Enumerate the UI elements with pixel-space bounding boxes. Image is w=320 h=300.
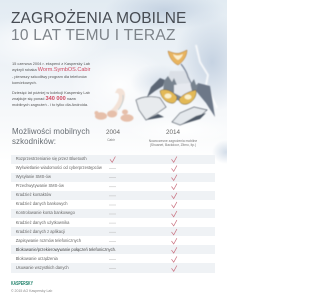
label modern threats: [149, 138, 197, 147]
row 11: Blokowanie/przekierowywanie połączeń telefonicznych: [16, 247, 115, 252]
title: [11, 9, 186, 44]
row 4: Przechwytywanie SMS-ów: [16, 183, 64, 188]
illustration: large scorpion 2014: [135, 49, 216, 126]
row 13: Usuwanie wszystkich danych: [16, 265, 69, 270]
title line 2: 10 LAT TEMU I TERAZ: [11, 27, 176, 44]
row 5: [11, 191, 215, 200]
intro text: wykryli robaka Worm.SymbOS.Cabir: [12, 67, 91, 73]
row 7: Kontrolowanie konta bankowego: [16, 210, 75, 215]
label modern threats: (Shuanet, Backdoor, Zitmo, itp.): [150, 142, 196, 146]
row 5: Kradzież kontaktów: [16, 192, 51, 197]
logo: KASPERSKY: [11, 281, 33, 287]
table heading: [12, 127, 90, 146]
comparison table: [11, 155, 215, 273]
table heading: Możliwości mobilnych: [12, 127, 90, 136]
second text: mobilnych zagrożeń - i to tylko dla Androida.: [12, 102, 88, 107]
row 8: Kradzież danych użytkownika: [16, 220, 69, 225]
row 6: Kradzież danych bankowych: [16, 201, 68, 206]
check marks and dashes: [109, 156, 178, 272]
year 2014: 2014: [166, 129, 180, 136]
row 2: Wyświetlanie wiadomości od cyberprzestępców: [16, 165, 102, 170]
row 9: Kradzież danych z aplikacji: [16, 229, 65, 234]
copyright: © 2015 AO Kaspersky Lab: [11, 289, 52, 293]
row 13: [11, 263, 215, 273]
second text: [12, 90, 90, 107]
row 7: [11, 209, 215, 218]
label modern threats: Nowoczesne zagrożenia mobilne: [149, 138, 197, 142]
intro text: 15 czerwca 2004 r. eksperci z Kaspersky Lab: [12, 61, 90, 66]
label Cabir: Cabir: [107, 138, 115, 142]
row 1: Rozprzestrzenianie się przez Bluetooth: [16, 156, 87, 161]
row 9: [11, 227, 215, 236]
row 12: Blokowanie urządzenia: [16, 256, 58, 261]
row 3: [11, 173, 215, 182]
column head 2004: [106, 129, 120, 142]
intro text: [12, 61, 91, 85]
row 10: Zapisywanie rozmów telefonicznych: [16, 238, 81, 243]
year 2004: 2004: [106, 129, 120, 136]
row 3: Wysyłanie SMS-ów: [16, 174, 51, 179]
title line 1: ZAGROŻENIA MOBILNE: [11, 10, 186, 27]
second text: znajduje się ponad 340 000 nazw: [12, 96, 76, 102]
background sky: [0, 0, 227, 162]
illustration: small scorpion 2004: [94, 88, 134, 122]
intro text: - pierwszy szkodliwy program dla telefonów: [12, 74, 87, 79]
intro text: komórkowych.: [12, 80, 37, 85]
table heading: szkodników:: [12, 137, 56, 146]
column head 2014: [149, 129, 197, 147]
row 11: [11, 245, 215, 254]
second text: Dziesięć lat później w kolekcji Kaspersky Lab: [12, 90, 90, 95]
row 1: [11, 154, 215, 164]
